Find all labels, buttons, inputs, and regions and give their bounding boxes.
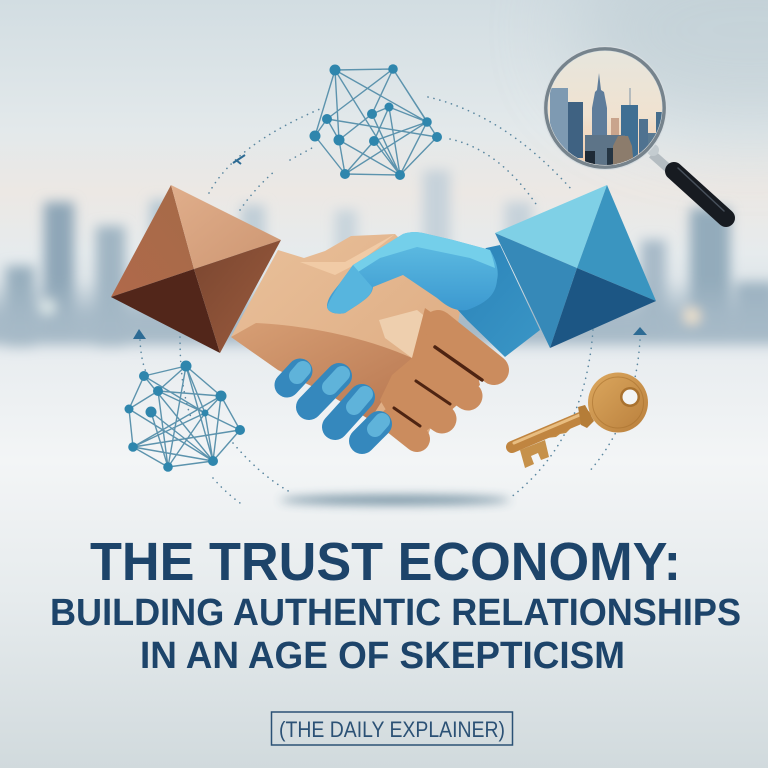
title bbox=[50, 532, 741, 677]
key collar bbox=[578, 405, 594, 428]
finger gaps bbox=[394, 347, 482, 426]
lens rim bbox=[546, 48, 664, 168]
key bit bbox=[520, 440, 549, 468]
icon: lower left network bbox=[124, 360, 245, 472]
handle bbox=[647, 144, 726, 218]
blue hand bbox=[327, 232, 540, 357]
title line 2: BUILDING AUTHENTIC RELATIONSHIPS bbox=[50, 592, 741, 634]
icon: brown cube cuff bbox=[111, 185, 281, 353]
icon: small arrow marks bbox=[133, 155, 647, 339]
handshake bbox=[231, 232, 540, 442]
tan palm block bbox=[380, 308, 480, 440]
blue thumb and back bbox=[327, 232, 498, 314]
key shaft bbox=[512, 416, 585, 447]
dotted orbit arcs bbox=[140, 97, 640, 503]
tan fingers bbox=[393, 325, 494, 439]
ground shadow bbox=[280, 496, 510, 504]
background corner shading bbox=[570, 0, 768, 130]
title line 3: IN AN AGE OF SKEPTICISM bbox=[140, 635, 625, 677]
key bow bbox=[588, 372, 648, 432]
icon: magnifying glass with city bbox=[543, 46, 726, 218]
icon: blue cube cuff bbox=[495, 185, 656, 348]
lens city bbox=[548, 51, 662, 165]
icon: top network bbox=[310, 64, 442, 180]
source badge bbox=[272, 712, 512, 745]
icon: golden key bbox=[512, 372, 648, 468]
blue fingers bbox=[287, 369, 382, 441]
blurred city skyline bbox=[0, 170, 768, 346]
tan hand bbox=[231, 234, 494, 442]
title line 1: THE TRUST ECONOMY: bbox=[90, 532, 681, 592]
blue wrist bbox=[445, 245, 540, 357]
source badge: (THE DAILY EXPLAINER) bbox=[279, 717, 505, 742]
